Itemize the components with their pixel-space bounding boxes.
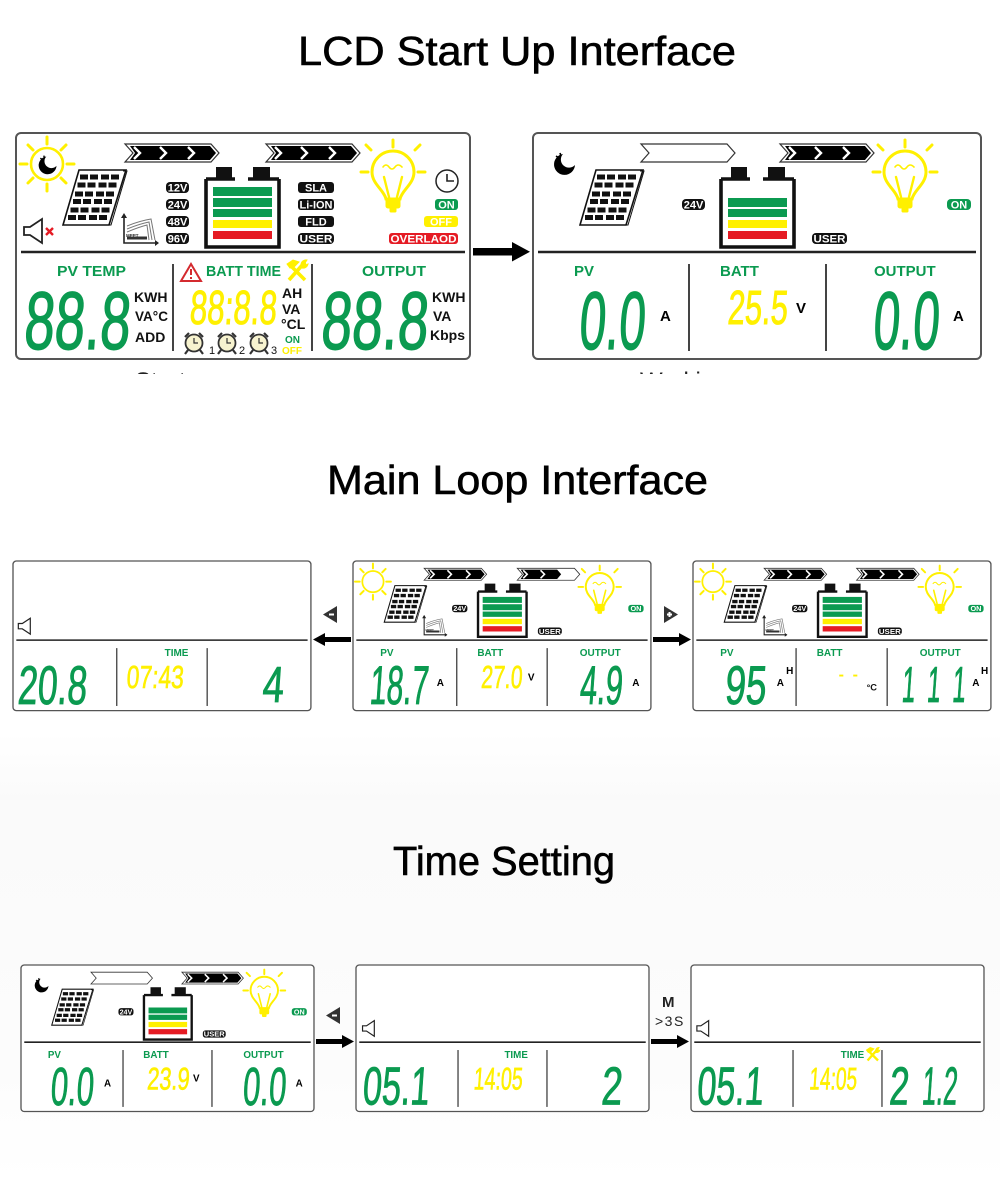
icon: MPPT curve — [121, 213, 159, 246]
panel: time setting right — [691, 965, 984, 1116]
battery type tags: Li-ION — [300, 200, 333, 212]
panel frame — [533, 133, 981, 359]
panel: main loop right — [693, 561, 991, 716]
icon: muted speaker — [24, 219, 53, 243]
button icon: minus — [323, 606, 337, 623]
timer on off labels — [282, 335, 302, 357]
tag: USER: USER — [879, 627, 902, 636]
clipped caption under start-up panel: Start up — [135, 368, 219, 395]
readout: 2: 2 — [600, 1056, 625, 1116]
unit: V: V — [193, 1073, 200, 1084]
panel frame — [691, 965, 984, 1111]
panel frame — [353, 561, 651, 711]
alarm clocks 1 2 3: 1 — [209, 345, 215, 357]
unit: A with superscript H: A — [777, 678, 784, 689]
voltage tags: 12V — [168, 182, 188, 194]
readout: 4: 4 — [261, 656, 286, 713]
heading: BATT: BATT — [477, 648, 503, 659]
unit: A: A — [953, 308, 964, 325]
icon: speaker — [697, 1021, 709, 1036]
timer on off labels: OFF — [282, 346, 302, 357]
icon: battery — [144, 987, 192, 1040]
units: AH VA CL: °CL — [281, 316, 306, 332]
heading: BATT: BATT — [143, 1050, 169, 1061]
icon: empty charging arrow — [641, 144, 735, 162]
unit: A: A — [660, 308, 671, 325]
icon: load flow arrow — [266, 144, 360, 162]
heading: BATT: BATT — [817, 648, 843, 659]
readout: 07:43: 07:43 — [126, 659, 185, 695]
voltage tags: 24V — [168, 200, 188, 212]
tag: ON: ON — [970, 604, 981, 613]
heading: BATT TIME: BATT TIME — [206, 263, 281, 280]
alarm clocks 1 2 3: 2 — [239, 345, 245, 357]
readout: 111: 1 — [951, 656, 968, 713]
icon: tools — [287, 260, 308, 280]
icon: clock — [436, 170, 458, 192]
icon: charging arrow — [424, 568, 487, 580]
unit: A with superscript H — [972, 666, 988, 689]
panel: time setting centre — [356, 965, 649, 1116]
icon: empty charging arrow — [91, 972, 152, 984]
title: Time Setting: Time Setting — [393, 838, 615, 884]
icon: light bulb — [918, 566, 961, 614]
battery type tags: SLA — [305, 182, 327, 194]
voltage tags — [166, 182, 189, 246]
panel frame — [16, 133, 470, 359]
arrow: start-up to working — [473, 242, 530, 262]
icon: tools — [866, 1047, 880, 1060]
unit: V: V — [528, 673, 535, 684]
panel frame — [693, 561, 991, 711]
voltage tags: 96V — [168, 234, 188, 246]
heading: TIME: TIME — [165, 648, 189, 659]
icon: sun — [355, 564, 391, 600]
icon: MPPT curve: MPPT — [126, 233, 139, 238]
readout: battery value: 88:8.8 — [188, 282, 279, 335]
units: KWH VA Kbps: Kbps — [430, 327, 465, 343]
readout: 111 — [900, 656, 968, 713]
unit: A with superscript H: H — [786, 666, 793, 677]
readout: 0.0: 0.0 — [241, 1057, 289, 1117]
readout: PV value: 88.8 — [22, 276, 134, 367]
icon: load arrow — [182, 972, 243, 984]
readout: dashes: - — [853, 666, 858, 683]
load status tags — [389, 199, 458, 246]
units: KWH VA C ADD: VA°C — [135, 308, 168, 324]
title: Main Loop Interface: Main Loop Interface — [327, 457, 708, 503]
readout: 21.2 — [888, 1056, 960, 1116]
battery type tags: FLD — [305, 216, 327, 228]
panel: start-up LCD — [16, 133, 470, 367]
heading: PV: PV — [380, 648, 394, 659]
tag: ON: ON — [951, 200, 967, 212]
panel frame — [21, 965, 314, 1111]
icon: charging arrow — [764, 568, 827, 580]
heading: TIME: TIME — [841, 1050, 865, 1061]
panel: working LCD — [533, 133, 981, 367]
unit: A: A — [104, 1079, 111, 1090]
heading: OUTPUT: OUTPUT — [243, 1050, 284, 1061]
icon: light bulb — [361, 140, 425, 212]
unit: A with superscript H: H — [981, 666, 988, 677]
units: KWH VA Kbps: VA — [433, 308, 451, 324]
readout: 95: 95 — [723, 655, 769, 716]
icon: battery — [721, 167, 794, 247]
unit: degrees C: °C — [867, 683, 877, 693]
heading: OUTPUT: OUTPUT — [362, 263, 426, 280]
load status tags: ON — [438, 200, 455, 212]
readout: 18.7: 18.7 — [368, 655, 431, 716]
alarm clocks 1 2 3: 3 — [271, 345, 277, 357]
icon: battery — [478, 584, 527, 637]
icon: solar panel — [580, 170, 644, 225]
icon: load arrow — [857, 568, 919, 580]
heading: OUTPUT: OUTPUT — [874, 263, 936, 280]
heading: OUTPUT: OUTPUT — [920, 648, 961, 659]
icon: moon — [554, 153, 575, 175]
panel: time setting left — [21, 965, 314, 1117]
button label: M more than 3S — [655, 994, 685, 1029]
readout: battery voltage: 25.5 — [726, 282, 790, 335]
tag: USER: USER — [814, 234, 846, 246]
voltage tags: 48V — [168, 216, 188, 228]
icon: charging flow arrow — [125, 144, 219, 162]
tag: 24V: 24V — [453, 604, 466, 613]
units: KWH VA Kbps: KWH — [432, 289, 465, 305]
units: AH VA CL: VA — [282, 301, 300, 317]
icon: moon — [35, 978, 48, 992]
icon: light bulb — [873, 140, 937, 212]
tag: USER: USER — [539, 627, 562, 636]
unit: A: A — [632, 678, 640, 689]
unit: A: A — [437, 678, 444, 689]
icon: MPPT curve: MPPT — [765, 628, 774, 632]
icon: solar panel — [52, 989, 94, 1025]
readout: 05.1: 05.1 — [695, 1056, 766, 1116]
readout: 14:05: 14:05 — [808, 1061, 858, 1096]
icon: MPPT curve — [762, 615, 787, 637]
tag: 24V: 24V — [793, 604, 806, 613]
icon: battery with five bars — [206, 167, 279, 247]
unit: V: V — [796, 300, 806, 317]
tag: 24V: 24V — [120, 1007, 133, 1016]
heading: PV TEMP: PV TEMP — [57, 263, 126, 280]
heading: TIME: TIME — [504, 1050, 528, 1061]
readout: output value: 88.8 — [319, 276, 432, 367]
battery type tags: USER — [300, 234, 333, 246]
icon: light bulb — [578, 566, 621, 614]
button icon: minus — [326, 1007, 340, 1024]
readout: output: 0.0 — [871, 276, 943, 367]
units: KWH VA C ADD — [134, 289, 168, 345]
icon: battery — [818, 584, 867, 637]
readout: 05.1: 05.1 — [361, 1056, 432, 1116]
readout: 14:05: 14:05 — [473, 1061, 524, 1096]
panel frame — [356, 965, 649, 1111]
arrow: to time setting — [651, 1035, 689, 1048]
tag: ON: ON — [630, 604, 641, 613]
readout: 21.2: 1.2 — [920, 1056, 960, 1116]
tag: ON — [947, 199, 971, 212]
readout: 21.2: 2 — [888, 1056, 911, 1116]
unit: A: A — [296, 1079, 303, 1090]
tag: ON: ON — [294, 1007, 305, 1016]
readout: PV: 0.0 — [577, 276, 649, 367]
readout: 27.0: 27.0 — [480, 659, 524, 695]
icon: warning triangle — [181, 264, 201, 281]
icon: partial load arrow — [517, 568, 580, 580]
icon: solar panel — [384, 586, 427, 622]
units: KWH VA C ADD: ADD — [135, 329, 165, 345]
icon: speaker — [363, 1021, 374, 1036]
tag: 24V: 24V — [684, 200, 704, 212]
readout: dashes: - — [839, 666, 844, 683]
title: LCD Start Up Interface: LCD Start Up Interface — [298, 28, 736, 74]
arrow: to right panel — [653, 633, 691, 646]
icon: solar panel — [63, 170, 127, 225]
icon: MPPT curve: MPPT — [425, 628, 434, 632]
icon: sun — [695, 564, 731, 600]
heading: PV: PV — [720, 648, 734, 659]
units: KWH VA Kbps — [430, 289, 465, 343]
button label: M more than 3S: M — [662, 994, 674, 1011]
heading: OUTPUT: OUTPUT — [580, 648, 621, 659]
panel frame — [13, 561, 311, 711]
readout: 4.9: 4.9 — [578, 655, 625, 716]
readout: 111: 1 — [900, 656, 918, 713]
heading: BATT: BATT — [720, 263, 759, 280]
units: KWH VA C ADD: KWH — [134, 289, 167, 305]
readout: 111: 1 — [926, 656, 943, 713]
unit: A with superscript H — [777, 666, 793, 689]
battery type tags — [298, 182, 334, 246]
arrow: to time panel — [316, 1035, 354, 1048]
icon: load flow arrow — [780, 144, 874, 162]
heading: PV: PV — [574, 263, 594, 280]
readout: 0.0: 0.0 — [49, 1057, 96, 1117]
alarm clocks 1 2 3 — [185, 333, 277, 357]
readout: 23.9: 23.9 — [146, 1061, 191, 1096]
icon: MPPT curve — [422, 615, 447, 637]
icon: speaker — [18, 618, 30, 634]
readout: dashes — [839, 666, 858, 683]
tag: USER: USER — [204, 1030, 226, 1039]
icon: solar panel — [724, 586, 767, 622]
timer on off labels: ON — [285, 335, 300, 346]
readout: 20.8: 20.8 — [16, 655, 90, 716]
units: AH VA CL — [281, 285, 306, 332]
arrow: to left panel — [313, 633, 351, 646]
unit: A with superscript H: A — [972, 678, 980, 689]
button icon: plus — [664, 606, 678, 623]
units: AH VA CL: AH — [282, 285, 302, 301]
load status tags: OVERLAOD — [390, 234, 457, 246]
heading: PV: PV — [48, 1050, 61, 1061]
icon: sun with moon — [20, 137, 74, 191]
clipped caption under working panel: Working — [640, 368, 728, 395]
button label: M more than 3S: >3S — [655, 1013, 685, 1029]
panel: main loop centre — [353, 561, 651, 716]
load status tags: OFF — [430, 216, 452, 228]
icon: light bulb — [243, 970, 285, 1017]
panel: main loop left, time readout — [13, 561, 311, 716]
